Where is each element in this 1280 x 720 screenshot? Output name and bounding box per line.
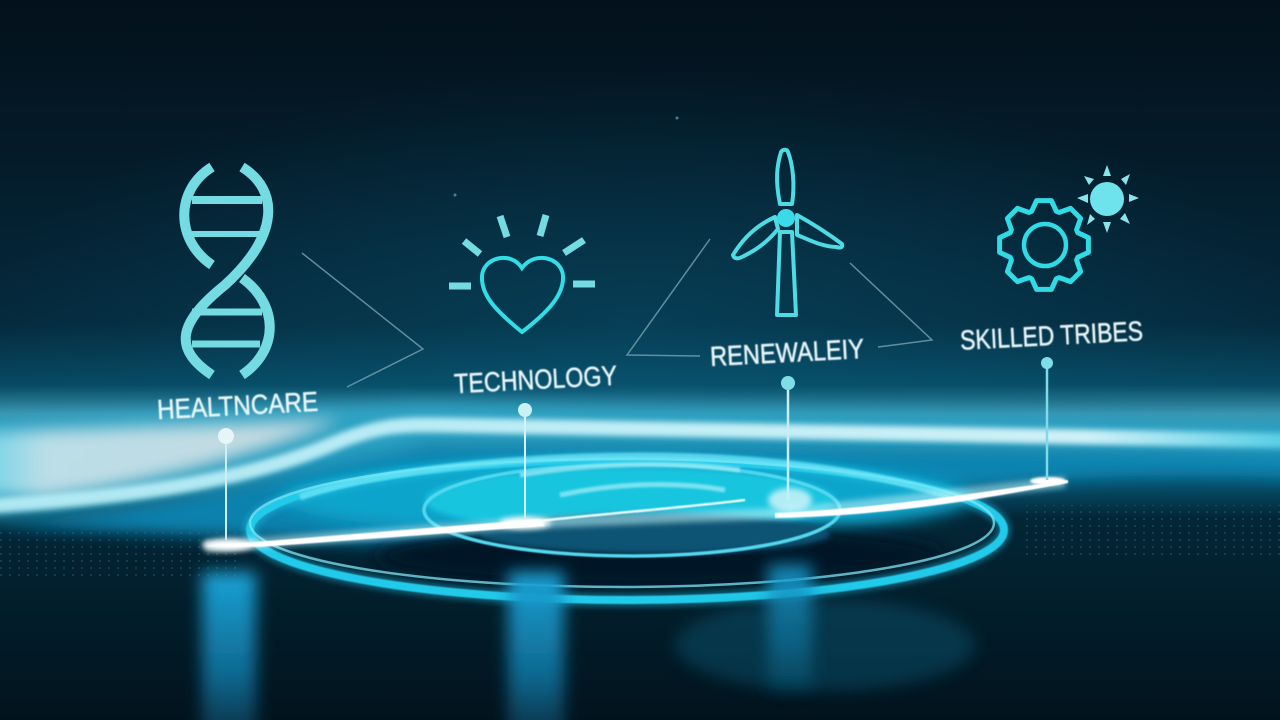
floor dot grid (0, 505, 1280, 580)
thin connector lines (302, 239, 932, 387)
inner disc (425, 467, 835, 533)
outer ring (250, 460, 1004, 600)
icon: heart with rays (449, 215, 595, 332)
sun (1077, 165, 1139, 233)
inner disc shadow (480, 514, 830, 554)
icon: DNA helix (184, 167, 270, 375)
label: renewables: RENEWALEIY (709, 333, 865, 372)
inner ring (424, 464, 840, 556)
pin: healthcare (218, 428, 234, 540)
icon: gear and sun (1000, 165, 1139, 289)
label: technology: TECHNOLOGY (453, 360, 618, 399)
label: healthcare: HEALTNCARE (156, 386, 319, 425)
central haze (0, 70, 1280, 570)
pin: renewables (781, 376, 795, 500)
blue floor glow under the band (0, 445, 1280, 545)
swirl highlights (520, 465, 740, 495)
horizon light band (0, 402, 1280, 520)
label: skilled trades: SKILLED TRIBES (959, 315, 1144, 356)
tiny particle (454, 194, 456, 196)
pins (218, 357, 1053, 540)
ring top highlight (300, 456, 950, 497)
tiny particle (676, 116, 678, 120)
icon: wind turbine (733, 150, 842, 315)
ring interior shadow (375, 526, 945, 586)
ring interior glow (280, 460, 970, 536)
pin: technology (518, 403, 532, 518)
gear (1000, 201, 1088, 289)
ring platform (250, 456, 1004, 600)
floor reflections (202, 565, 975, 720)
pin: skilled trades (1041, 357, 1053, 480)
connecting light line (202, 477, 1068, 551)
